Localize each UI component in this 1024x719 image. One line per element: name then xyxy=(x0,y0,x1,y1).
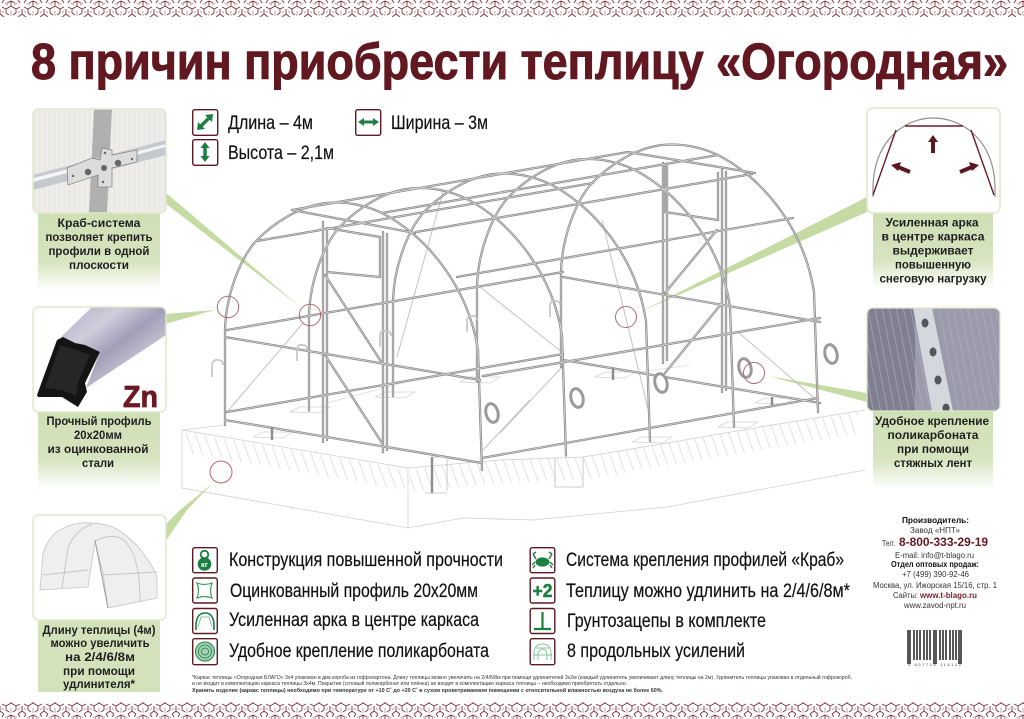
green pointer beams xyxy=(165,192,867,542)
detail circles xyxy=(210,296,764,483)
manufacturer contacts: Москва, ул. Ижорская 15/16, стр. 1 xyxy=(873,581,998,590)
photo frame xyxy=(33,307,166,412)
caption: стяжных лент xyxy=(894,458,972,470)
ground plates xyxy=(253,372,795,443)
manufacturer contacts: E-mail: info@t-blago.ru xyxy=(895,551,974,560)
caption: на 2/4/6/8м xyxy=(65,652,135,664)
icon: arch xyxy=(193,608,217,634)
caption background xyxy=(38,412,160,488)
manufacturer contacts xyxy=(873,515,998,610)
caption: плоскости xyxy=(69,260,129,272)
photo: zinc profile: Zn xyxy=(123,379,158,414)
text: length: Длина – 4м xyxy=(228,112,313,134)
manufacturer contacts: Производитель: xyxy=(902,515,969,525)
photo frame xyxy=(33,515,166,620)
caption xyxy=(42,625,156,691)
top ornament band xyxy=(0,0,1024,17)
caption: стали xyxy=(82,458,114,470)
text: ground stakes: Грунтозацепы в комплекте xyxy=(567,611,766,632)
icon: profile xyxy=(193,578,217,603)
icon: kettlebell: кг xyxy=(201,560,208,569)
ground hooks xyxy=(212,301,560,377)
text: mounting: Удобное крепление поликарбоната xyxy=(229,641,489,662)
caption xyxy=(46,218,152,272)
caption: 20х20мм xyxy=(74,430,122,442)
caption background xyxy=(38,620,160,692)
photo: zinc profile xyxy=(33,307,166,414)
caption: поликарбоната xyxy=(888,430,979,442)
diagram: arch xyxy=(867,108,1000,213)
photo frame xyxy=(33,109,166,213)
coils of strap xyxy=(484,343,839,424)
light diagonal braces xyxy=(227,192,820,450)
caption background xyxy=(873,213,993,289)
barcode: 4 607715 114122 xyxy=(908,662,962,667)
caption: позволяет крепить xyxy=(46,232,152,244)
manufacturer contacts: +7 (499) 390-92-46 xyxy=(902,570,970,579)
manufacturer contacts: Завод «НПТ» xyxy=(910,526,961,535)
caption background xyxy=(38,213,160,291)
metal tubes xyxy=(225,144,820,470)
foundation slab xyxy=(182,365,865,528)
icon: coil xyxy=(193,639,217,665)
caption: в центре каркаса xyxy=(882,232,985,244)
bottom ornament band xyxy=(0,702,1024,719)
caption: профили в одной xyxy=(48,246,150,258)
icon: kettlebell xyxy=(193,548,217,573)
text: ribs: 8 продольных усилений xyxy=(567,641,745,662)
text: height: Высота – 2,1м xyxy=(228,142,334,164)
caption: Удобное крепление xyxy=(875,416,989,428)
photo: crab connector xyxy=(33,109,166,213)
icon: width xyxy=(356,110,381,135)
caption: повышенную xyxy=(895,260,971,272)
footnote xyxy=(192,674,852,694)
manufacturer contacts: www.t-blago.ru xyxy=(919,590,977,600)
icon: plus two xyxy=(530,578,555,603)
photo: tunnel extension xyxy=(40,522,166,608)
dimensions xyxy=(193,110,488,165)
manufacturer contacts: Сайты: xyxy=(893,591,918,600)
manufacturer contacts: 8-800-333-29-19 xyxy=(899,535,988,549)
text: profile: Оцинкованный профиль 20х20мм xyxy=(230,581,478,602)
manufacturer contacts: Тел: xyxy=(882,539,895,548)
caption: выдерживает xyxy=(892,246,974,258)
caption background xyxy=(873,411,993,489)
pointer: reinforced arch xyxy=(640,197,867,312)
icon: ribs xyxy=(530,639,555,665)
icon: plus two: +2 xyxy=(532,581,552,601)
footnote: и не входит в комплектацию каркаса теплицы 3х4м. Покрытие (сотовый поликарбонат или плёнка) не входит в комплектацию каркаса теплицы – необходимо приобретать отдельно. xyxy=(192,680,627,687)
manufacturer contacts: www.zavod-npt.ru xyxy=(903,601,966,610)
photo frame xyxy=(867,308,1000,411)
caption xyxy=(875,416,989,470)
caption: Усиленная арка xyxy=(886,218,979,230)
text: crab system: Система крепления профилей «Краб» xyxy=(566,550,844,571)
panel: extension xyxy=(33,515,166,692)
pointer: profile xyxy=(165,310,215,324)
stakes xyxy=(272,368,772,493)
icon: height xyxy=(193,140,218,165)
panel: reinforced arch xyxy=(867,108,1000,289)
icon: crab xyxy=(530,548,555,573)
text: arch: Усиленная арка в центре каркаса xyxy=(229,610,479,631)
caption xyxy=(46,416,152,470)
footnote: *Каркас теплицы «Огородная БЛАГО» 3х4 упакован в два короба из гофрокартона. Длину теплицы можно увеличить на 2/4/6/8м при помощи удлинителей 3х2м (каждый удлинитель увеличивает длину теплицы на 2м). Удлинитель теплицы упакован в отдельный гофрокороб, xyxy=(192,674,852,681)
icon: ground stake xyxy=(530,608,555,634)
footnote: Хранить изделие (каркас теплицы) необходимо при температуре от +10 С˚ до +20 С˚ в сухом проветриваемом помещении с относительной влажностью воздуха не более 60%. xyxy=(192,687,663,694)
caption: можно увеличить xyxy=(50,638,150,650)
caption: при помощи xyxy=(897,444,969,456)
caption xyxy=(880,218,987,286)
panel: strong profile xyxy=(33,307,166,488)
icon: length xyxy=(193,110,218,135)
manufacturer contacts: Отдел оптовых продаж: xyxy=(891,559,979,569)
panel: crab system xyxy=(33,109,166,291)
pointer: straps xyxy=(768,376,867,402)
caption: Краб-система xyxy=(58,218,141,230)
feature list xyxy=(193,548,851,665)
text: width: Ширина – 3м xyxy=(391,112,488,134)
caption: удлинителя* xyxy=(63,679,136,691)
text: extension: Теплицу можно удлинить на 2/4/6/8м* xyxy=(566,581,851,602)
caption: Прочный профиль xyxy=(46,416,152,428)
panel: polycarbonate straps xyxy=(867,308,1000,489)
caption: из оцинкованной xyxy=(48,444,148,456)
pointer: extension xyxy=(165,483,213,542)
pointer: crab system xyxy=(165,192,298,305)
text: strength: Конструкция повышенной прочности xyxy=(229,550,503,571)
barcode xyxy=(908,630,962,667)
caption: при помощи xyxy=(63,666,135,678)
caption: Длину теплицы (4м) xyxy=(42,625,156,637)
caption: снеговую нагрузку xyxy=(880,274,987,286)
greenhouse frame xyxy=(210,144,839,493)
photo: strap on polycarbonate xyxy=(867,308,1000,412)
